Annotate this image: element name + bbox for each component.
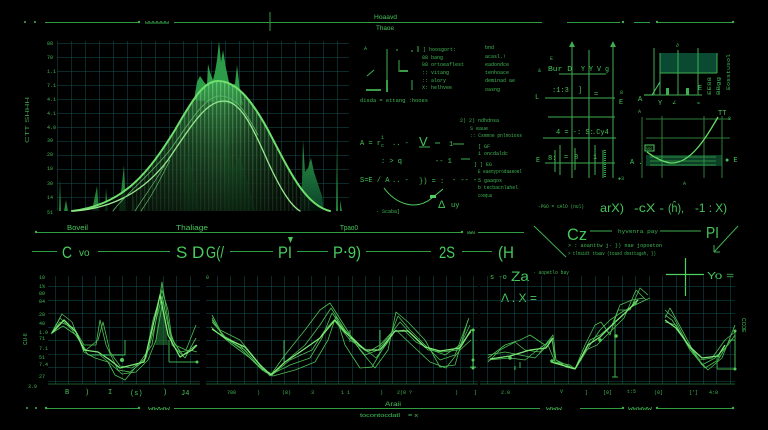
formula band	[32, 237, 514, 262]
panel: table diagram: 8	[574, 154, 578, 162]
text block: equations: 1	[381, 135, 384, 141]
x axis labels: V	[560, 389, 563, 395]
text block: equations: c	[381, 143, 384, 149]
formula row right: (ĥ),	[668, 200, 684, 215]
panel: small filled chart: ∂	[676, 43, 679, 49]
panel: small curve chart: TT	[718, 110, 726, 118]
panel: legend block: acasl.!	[485, 54, 506, 60]
histogram spikes	[59, 41, 342, 211]
panel: table diagram: .Cy4	[592, 129, 609, 137]
panel: table diagram: L	[535, 94, 539, 102]
panel: legend block: tenhoace	[485, 70, 509, 76]
panel: small filled chart: ∠	[672, 100, 676, 108]
bottom rule: wwww	[148, 406, 170, 412]
callout: Cz heading: hyvenra pay	[618, 229, 658, 235]
text block: equations: .. -	[392, 177, 409, 185]
y axis labels: 71	[39, 336, 45, 342]
formula row right: arX)	[600, 201, 624, 215]
x axis labels: )	[85, 389, 89, 397]
x axis labels: ]	[474, 390, 477, 396]
callout: Cz heading: Cz	[567, 225, 587, 244]
panel: table diagram: E	[619, 99, 623, 107]
panel: table diagram: 4 = -: S:	[556, 129, 594, 137]
text block: numbered notes: 1 oncdaldc	[478, 151, 508, 157]
text block: numbered notes: cooqua	[478, 193, 492, 199]
x axis labels: 708	[227, 390, 236, 396]
panel: small curve chart: ● E	[725, 157, 738, 165]
formula band: P⋅9)	[333, 243, 361, 262]
y axis labels: 51	[47, 210, 53, 216]
text block: numbered notes: [ GF	[478, 144, 490, 150]
callout: Cz heading: > : aoanttw j· }) nae jopoeton	[568, 243, 662, 249]
panel: table diagram: &	[538, 68, 541, 74]
y axis labels: 84	[39, 299, 45, 305]
x axis labels: I	[108, 389, 112, 397]
panel: table diagram: 1	[593, 154, 597, 162]
bars under bell	[72, 81, 330, 211]
panel: small filled chart: Y	[658, 100, 663, 108]
panel: legend block: deminad ae	[485, 78, 515, 84]
bell curves	[72, 81, 330, 211]
y axis labels: 4.1	[47, 111, 56, 117]
panel: legend block: 88 bang	[422, 55, 443, 61]
panel: legend block: X: helhvee	[422, 85, 452, 91]
panel: table diagram: Y Y V g	[581, 66, 609, 74]
panel: legend block: :: vitang	[422, 70, 449, 76]
formula band: vo	[79, 248, 90, 259]
y axis labels: 28	[47, 152, 53, 158]
x axis labels of main chart	[67, 225, 358, 232]
top rule: wwwwww	[145, 20, 169, 26]
footer labels: tocontocdatl	[360, 413, 400, 419]
y axis labels: 28	[39, 312, 45, 318]
panel: small curve chart: 8	[728, 116, 731, 122]
y axis labels: 70	[47, 55, 53, 61]
x axis labels: )	[380, 390, 383, 396]
text block: equations: A = r	[360, 140, 381, 148]
y axis labels: 7.1	[39, 346, 48, 352]
bottom rule: www	[546, 406, 562, 412]
panel: table diagram: ]	[578, 87, 582, 95]
y axis labels: 7.1	[47, 83, 56, 89]
x axis labels: 3	[311, 390, 314, 396]
panel: bottom chart three	[474, 276, 746, 396]
x axis labels: )	[257, 390, 260, 396]
panel: small filled chart: E	[698, 85, 702, 93]
panel: legend block	[360, 45, 515, 104]
x axis labels: 1 1	[341, 390, 350, 396]
panel: table diagram: ●3	[618, 176, 624, 182]
title labels	[374, 14, 397, 32]
y axis labels: 14	[47, 195, 53, 201]
x axis labels: (s)	[130, 390, 143, 398]
x axis labels of main chart: Boveil	[67, 225, 88, 232]
text block: numbered notes: S eaue	[470, 126, 488, 132]
top rule	[24, 12, 734, 31]
panel: small filled chart: Eosstusol	[726, 54, 732, 90]
formula band: C	[62, 243, 72, 262]
callout: crosshair: Yo =	[707, 271, 734, 282]
bottom rule: wwwww	[628, 406, 652, 412]
y axis labels: 1%	[39, 284, 45, 290]
panel: bottom chart two: 0	[206, 275, 209, 281]
text block: equations: - -- -	[452, 177, 477, 185]
panel: small curve chart: A .	[630, 159, 643, 167]
text block: equations: uy	[451, 202, 459, 210]
bottom rule	[26, 406, 734, 412]
text block: numbered notes: E eaenyprodaaeoel	[478, 169, 522, 175]
text block: numbered notes: 5 gaaqos	[478, 178, 502, 184]
callout: Za formula: s -o	[490, 274, 507, 282]
callout: Za formula: Za	[511, 268, 529, 284]
formula band: 2S	[439, 243, 455, 262]
panel: small filled chart	[638, 43, 732, 108]
panel: table diagram	[535, 41, 624, 182]
formula row right: -PGO = cAlO (nul)	[538, 204, 584, 210]
panel: main bell curve chart	[25, 41, 349, 216]
panel: bottom chart one	[23, 275, 200, 398]
x axis labels	[227, 390, 458, 396]
text block: equations: .. -	[392, 140, 409, 148]
panel: bottom chart one: CU·II	[23, 333, 29, 345]
x axis labels: ]	[585, 390, 588, 396]
y axis labels: 18	[47, 166, 53, 172]
text block: numbered notes: b tecbacnlahel	[478, 185, 518, 191]
y axis labels: 88	[47, 41, 53, 47]
y axis labels: 1.9	[39, 330, 48, 336]
x axis labels	[474, 389, 718, 396]
panel: small curve chart: A	[683, 181, 686, 187]
callout: Za formula	[490, 268, 569, 305]
panel: bottom chart two	[206, 275, 478, 396]
panel: small filled chart: =	[697, 101, 700, 107]
y axis labels	[28, 275, 48, 390]
text block: equations: V	[419, 134, 428, 149]
text block: numbered notes: ] ] EG	[474, 162, 492, 168]
panel: table diagram: 8:	[548, 155, 556, 163]
formula row right: -1 : X)	[695, 201, 727, 215]
y axis labels: 4.0	[47, 125, 56, 131]
panel: small curve chart	[630, 109, 738, 187]
panel: table diagram: E	[550, 56, 553, 62]
formula row right	[538, 200, 727, 215]
panel: small filled chart: BBgg	[716, 77, 722, 95]
panel: small filled chart: A	[638, 96, 643, 104]
text block: numbered notes: :: Csnmoe pnlnoioss	[470, 133, 522, 139]
y axis labels: 7.4	[39, 362, 48, 368]
panel: table diagram: :1:3	[552, 87, 569, 95]
footer labels	[360, 402, 419, 419]
text block: equations: -- 1	[435, 158, 452, 166]
y axis labels: 4.1	[47, 97, 56, 103]
y axis labels: 10	[39, 275, 45, 281]
y axis labels: 30	[47, 138, 53, 144]
x axis labels	[65, 389, 189, 398]
text block: equations: Δ	[438, 199, 446, 211]
callout: Cz heading: > tlnaidt ttwav (toasd dosttageh, })	[568, 251, 656, 257]
title labels: Hoaavd	[374, 14, 397, 21]
callout: Za formula: · aopetlo bay	[533, 270, 569, 276]
panel: legend block: A	[364, 46, 367, 52]
panel: table diagram: =	[564, 154, 568, 162]
footer labels: Araii	[385, 402, 401, 408]
formula row right: -cX -	[634, 201, 664, 215]
footer labels: = x	[408, 413, 419, 419]
x axis labels: )	[163, 389, 167, 397]
x axis labels: t:5	[627, 389, 636, 395]
formula band: PI	[278, 243, 292, 262]
x axis labels: (8)	[282, 390, 291, 396]
x axis labels: (0]	[654, 390, 663, 396]
panel: small curve chart: 88	[646, 146, 652, 152]
panel: table diagram: E	[536, 157, 540, 165]
text block: numbered notes	[460, 118, 522, 199]
callout: Cz heading	[534, 225, 738, 257]
formula band: S	[176, 243, 187, 262]
panel: table diagram: Bur D	[548, 66, 572, 74]
x axis labels: [']	[689, 390, 698, 396]
x axis labels of main chart: Thaliage	[176, 225, 208, 232]
text block: equations: }) = :	[419, 178, 444, 186]
text block: equations: : > q	[381, 158, 402, 166]
y axis labels: 80	[39, 291, 45, 297]
y axis labels: 27	[39, 374, 45, 380]
text block: numbered notes: 2) 2) ndhdnsa	[460, 118, 499, 124]
x axis labels: J4	[181, 390, 189, 398]
y axis labels: 40	[39, 321, 45, 327]
x axis labels: B	[65, 389, 69, 397]
text block: equations: - Scaba]	[376, 209, 400, 215]
callout: Cz heading: PI	[706, 225, 719, 242]
panel: table diagram: 8	[620, 90, 623, 96]
formula band: G(/	[206, 243, 224, 262]
y axis labels: 3.0	[28, 384, 37, 390]
y axis labels: 1.1	[47, 69, 56, 75]
text block: equations	[360, 134, 477, 215]
panel: legend block: bnd	[485, 45, 494, 51]
title labels: Thaoe	[376, 26, 395, 32]
panel: legend block: ] hoosgort:	[423, 47, 456, 53]
panel: small filled chart: EE88	[707, 77, 713, 95]
text block: equations: 1	[449, 141, 453, 149]
panel: legend block: eadondce	[485, 62, 509, 68]
y axis labels: 51	[39, 355, 45, 361]
panel: legend block: :: alory	[422, 78, 446, 84]
panel: table diagram: =	[594, 91, 598, 99]
x axis labels: )	[455, 390, 458, 396]
x axis labels of main chart: Tpao0	[340, 225, 358, 232]
y axis labels	[47, 41, 56, 216]
x axis labels: 4:8	[709, 390, 718, 396]
text block: equations: S=E / A	[360, 177, 390, 185]
callout: Za formula: Λ . X =	[501, 291, 537, 305]
y axis labels: 30	[47, 181, 53, 187]
x axis labels: 2(0 ?	[397, 390, 412, 396]
middle rule: www	[467, 230, 475, 236]
panel: legend block: 88 ortoeaflest	[422, 62, 464, 68]
x axis labels: [0]	[603, 390, 612, 396]
formula band: D	[192, 243, 204, 262]
callout: crosshair	[666, 258, 734, 296]
panel: bottom chart three: CCOE	[740, 318, 746, 333]
panel: small curve chart: A	[638, 109, 641, 115]
panel: legend block: disda = ettang :hooes	[360, 98, 428, 104]
y axis title: CTT SHHH	[25, 97, 31, 143]
formula band: (H	[498, 243, 514, 262]
panel: legend block: oasng	[485, 87, 500, 93]
x axis labels: 2.0	[501, 390, 510, 396]
